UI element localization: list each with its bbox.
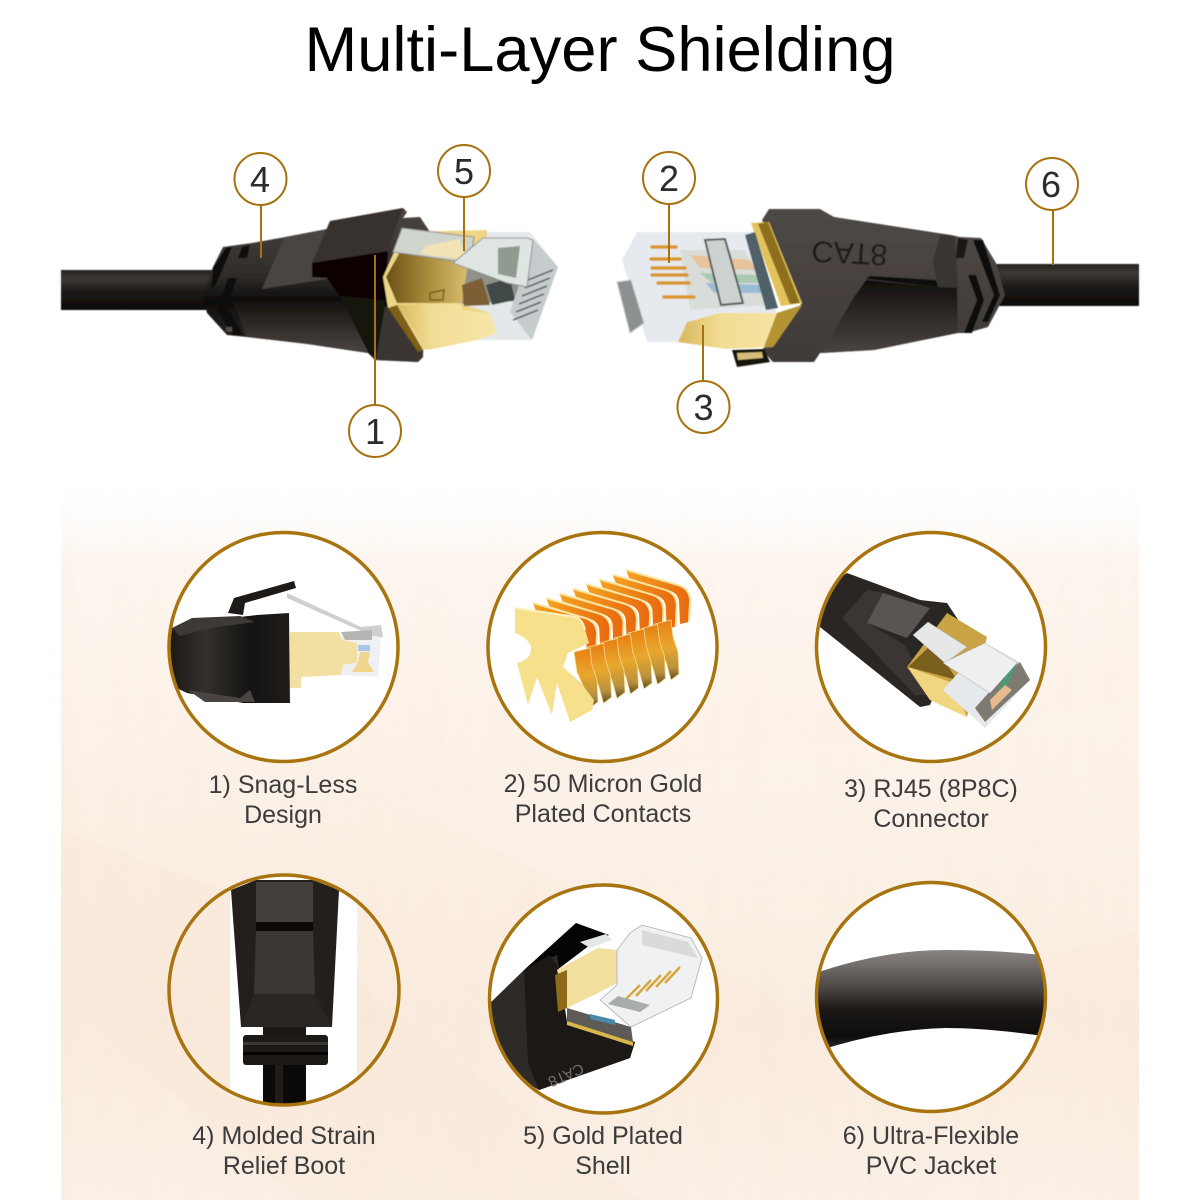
callout 6: 6 (1041, 164, 1061, 205)
detail image: angled connector (810, 573, 1030, 728)
title: Multi-Layer Shielding (304, 15, 896, 85)
callout 3 (678, 325, 730, 433)
plug tip latch (617, 280, 644, 333)
caption 5: 5) Gold Plated (523, 1122, 683, 1150)
callout 4 (234, 153, 286, 258)
gold shell (383, 230, 497, 350)
callout 2 (643, 152, 695, 263)
plug window (705, 239, 743, 305)
caption 5: Shell (575, 1152, 631, 1180)
caption 3: 3) RJ45 (8P8C) (844, 775, 1018, 803)
right boot body (762, 209, 1005, 362)
callout 3: 3 (693, 387, 714, 428)
caption 4: Relief Boot (223, 1152, 345, 1180)
gold shell (751, 222, 802, 306)
left cable (61, 270, 213, 310)
callout 5 (438, 145, 490, 251)
panel: gold plated shell (485, 885, 718, 1180)
snag-less latch cover (312, 208, 403, 263)
detail image: curved cable (810, 950, 1050, 1052)
boot side panel (262, 229, 333, 289)
strain relief slits (211, 247, 232, 290)
CAT8 embossed text: CAT8 (811, 234, 888, 271)
gold contacts (651, 247, 694, 297)
clear RJ45 plug (462, 232, 558, 340)
caption 1: Design (244, 801, 322, 829)
panel: snag-less design (160, 532, 398, 829)
lower boot panel (822, 280, 958, 353)
callout 1: 1 (365, 411, 385, 452)
caption 3: Connector (873, 805, 989, 833)
callout 6 (1026, 158, 1078, 265)
detail image: side connector (160, 581, 383, 703)
panel: molded strain relief boot (169, 874, 399, 1180)
detail image: shell close-up (485, 923, 702, 1090)
panel: gold contacts (488, 532, 717, 828)
caption 2: Plated Contacts (515, 800, 691, 828)
callout 5: 5 (454, 151, 474, 192)
clear plug latch (393, 228, 474, 263)
caption 6: PVC Jacket (866, 1152, 996, 1180)
right connector (617, 209, 1139, 367)
panel: PVC jacket (810, 882, 1050, 1180)
left boot body (203, 208, 430, 362)
clear RJ45 plug (622, 232, 777, 342)
callout 1 (349, 255, 401, 457)
left connector (61, 208, 558, 362)
callout 2: 2 (659, 158, 679, 199)
callout 4: 4 (250, 159, 270, 200)
right cable (990, 264, 1139, 306)
strain relief slits (956, 238, 968, 258)
under latch (732, 349, 770, 367)
caption 6: 6) Ultra-Flexible (843, 1122, 1019, 1150)
caption 4: 4) Molded Strain (192, 1122, 376, 1150)
detail image: gold contact comb (515, 570, 690, 722)
panel: RJ45 connector (810, 532, 1046, 833)
wood background panel (61, 478, 1139, 1200)
caption 2: 2) 50 Micron Gold (504, 770, 702, 798)
detail image: boot front view (230, 874, 357, 1107)
embossed CAT8: CAT8 (545, 1059, 586, 1090)
caption 1: 1) Snag-Less (209, 771, 357, 799)
